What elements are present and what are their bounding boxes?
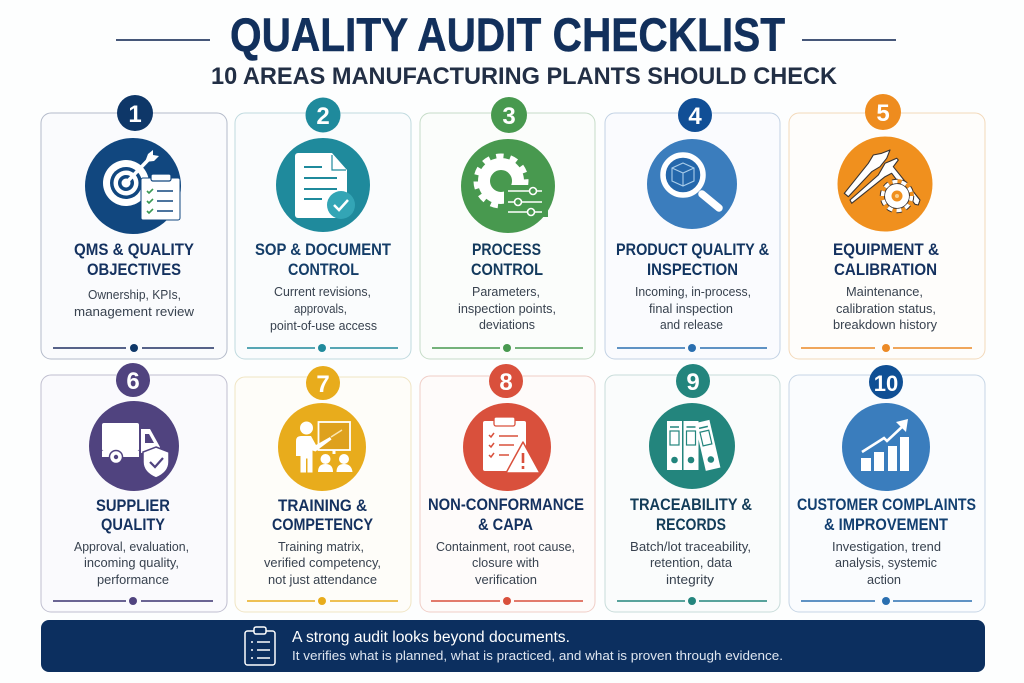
heading: QUALITY xyxy=(101,515,166,534)
description: Current revisions, xyxy=(274,285,371,299)
badge 7: 7 xyxy=(316,371,330,398)
icon: clipboard xyxy=(245,627,275,665)
badge 5 xyxy=(865,94,901,130)
description: Training matrix, xyxy=(278,540,364,554)
badge 4 xyxy=(678,98,712,132)
heading: CALIBRATION xyxy=(834,260,937,279)
icon: magnifier and box xyxy=(647,139,737,229)
description: Investigation, trend xyxy=(832,540,941,554)
heading: SUPPLIER xyxy=(96,496,170,515)
heading: CONTROL xyxy=(471,260,543,279)
heading: SOP & DOCUMENT xyxy=(255,240,392,259)
description xyxy=(832,540,941,587)
heading xyxy=(797,495,976,534)
subtitle: 10 AREAS MANUFACTURING PLANTS SHOULD CHECK xyxy=(211,63,838,90)
heading: TRACEABILITY & xyxy=(630,495,752,514)
description: integrity xyxy=(666,573,715,587)
badge 10 xyxy=(869,365,903,399)
panel: equipment and calibration xyxy=(789,94,985,359)
heading: OBJECTIVES xyxy=(87,260,181,279)
description xyxy=(436,540,575,587)
description: Ownership, KPIs, xyxy=(88,288,181,302)
panel: QMS and quality objectives xyxy=(41,95,227,359)
description xyxy=(635,285,751,332)
badge 5: 5 xyxy=(876,100,890,127)
heading xyxy=(272,496,374,534)
heading: INSPECTION xyxy=(647,260,738,279)
icon: gear and sliders xyxy=(461,139,555,233)
panel: product quality and inspection xyxy=(605,98,780,359)
badge 10: 10 xyxy=(874,371,898,396)
description: approvals, xyxy=(294,302,347,316)
banner text: A strong audit looks beyond documents. xyxy=(292,629,570,646)
description xyxy=(264,540,381,587)
description: verification xyxy=(475,573,537,587)
icon: binders xyxy=(649,403,735,489)
heading xyxy=(833,240,939,279)
panel: customer complaints and improvement xyxy=(789,365,985,612)
description: Parameters, xyxy=(472,285,540,299)
description: Batch/lot traceability, xyxy=(630,540,751,554)
description: breakdown history xyxy=(833,318,938,332)
heading: QMS & QUALITY xyxy=(74,240,195,259)
heading: CUSTOMER COMPLAINTS xyxy=(797,495,976,514)
description: calibration status, xyxy=(836,302,936,316)
heading: TRAINING & xyxy=(278,496,367,515)
heading: EQUIPMENT & xyxy=(833,240,939,259)
description: verified competency, xyxy=(264,556,381,570)
heading xyxy=(428,495,584,534)
badge 2: 2 xyxy=(316,103,330,130)
icon: document with check xyxy=(276,138,370,232)
description: action xyxy=(867,573,901,587)
heading: NON-CONFORMANCE xyxy=(428,495,584,514)
heading xyxy=(96,496,170,534)
badge 7 xyxy=(306,366,340,400)
panel: SOP and document control xyxy=(235,98,411,359)
description: Maintenance, xyxy=(846,285,923,299)
panel: non-conformance and CAPA xyxy=(420,364,595,612)
description: retention, data xyxy=(650,556,732,570)
badge 8: 8 xyxy=(499,369,513,396)
icon: caliper and gear xyxy=(838,136,932,232)
heading: & CAPA xyxy=(478,515,533,534)
title: QUALITY AUDIT CHECKLIST xyxy=(230,8,785,61)
banner text xyxy=(292,629,783,663)
description xyxy=(270,285,377,333)
panel: process control xyxy=(420,97,595,359)
icon: truck and shield xyxy=(89,401,179,491)
panel: supplier quality xyxy=(41,363,227,612)
description: incoming quality, xyxy=(84,556,179,570)
description xyxy=(630,540,751,587)
heading xyxy=(471,240,543,279)
description: closure with xyxy=(472,556,539,570)
description: management review xyxy=(74,305,195,319)
description: inspection points, xyxy=(458,302,556,316)
description: analysis, systemic xyxy=(835,556,937,570)
description: Approval, evaluation, xyxy=(74,540,189,554)
description: point-of-use access xyxy=(270,319,377,333)
panel: training and competency xyxy=(235,366,411,612)
description: Containment, root cause, xyxy=(436,540,575,554)
badge 6: 6 xyxy=(126,368,140,395)
icon: rising bar chart xyxy=(842,403,930,491)
icon: clipboard and warning xyxy=(463,403,551,491)
badge 1 xyxy=(117,95,153,131)
description: final inspection xyxy=(649,302,733,316)
heading: RECORDS xyxy=(656,515,726,534)
description xyxy=(74,288,195,319)
icon: target and clipboard xyxy=(85,138,181,234)
heading: COMPETENCY xyxy=(272,515,374,534)
description xyxy=(458,285,556,332)
badge 1: 1 xyxy=(128,101,142,128)
banner text: It verifies what is planned, what is practiced, and what is proven through evidence. xyxy=(292,648,783,663)
description: and release xyxy=(660,318,723,332)
badge 4: 4 xyxy=(688,103,702,130)
description xyxy=(74,540,189,587)
badge 3 xyxy=(491,97,527,133)
heading xyxy=(616,240,769,279)
heading: PRODUCT QUALITY & xyxy=(616,240,769,259)
heading: & IMPROVEMENT xyxy=(824,515,949,534)
badge 9 xyxy=(676,364,710,398)
description: not just attendance xyxy=(268,573,377,587)
heading: PROCESS xyxy=(472,240,541,259)
callout banner xyxy=(41,620,985,672)
panel: traceability and records xyxy=(605,364,780,612)
badge 3: 3 xyxy=(502,103,516,130)
icon: trainer and audience xyxy=(278,403,366,491)
badge 8 xyxy=(489,364,523,398)
description xyxy=(833,285,938,332)
description: performance xyxy=(97,573,169,587)
badge 6 xyxy=(116,363,150,397)
description: Incoming, in-process, xyxy=(635,285,751,299)
badge 2 xyxy=(306,98,340,132)
heading xyxy=(74,240,195,279)
heading: CONTROL xyxy=(288,260,359,279)
heading xyxy=(255,240,392,279)
heading xyxy=(630,495,752,534)
description: deviations xyxy=(479,318,535,332)
badge 9: 9 xyxy=(686,369,700,396)
